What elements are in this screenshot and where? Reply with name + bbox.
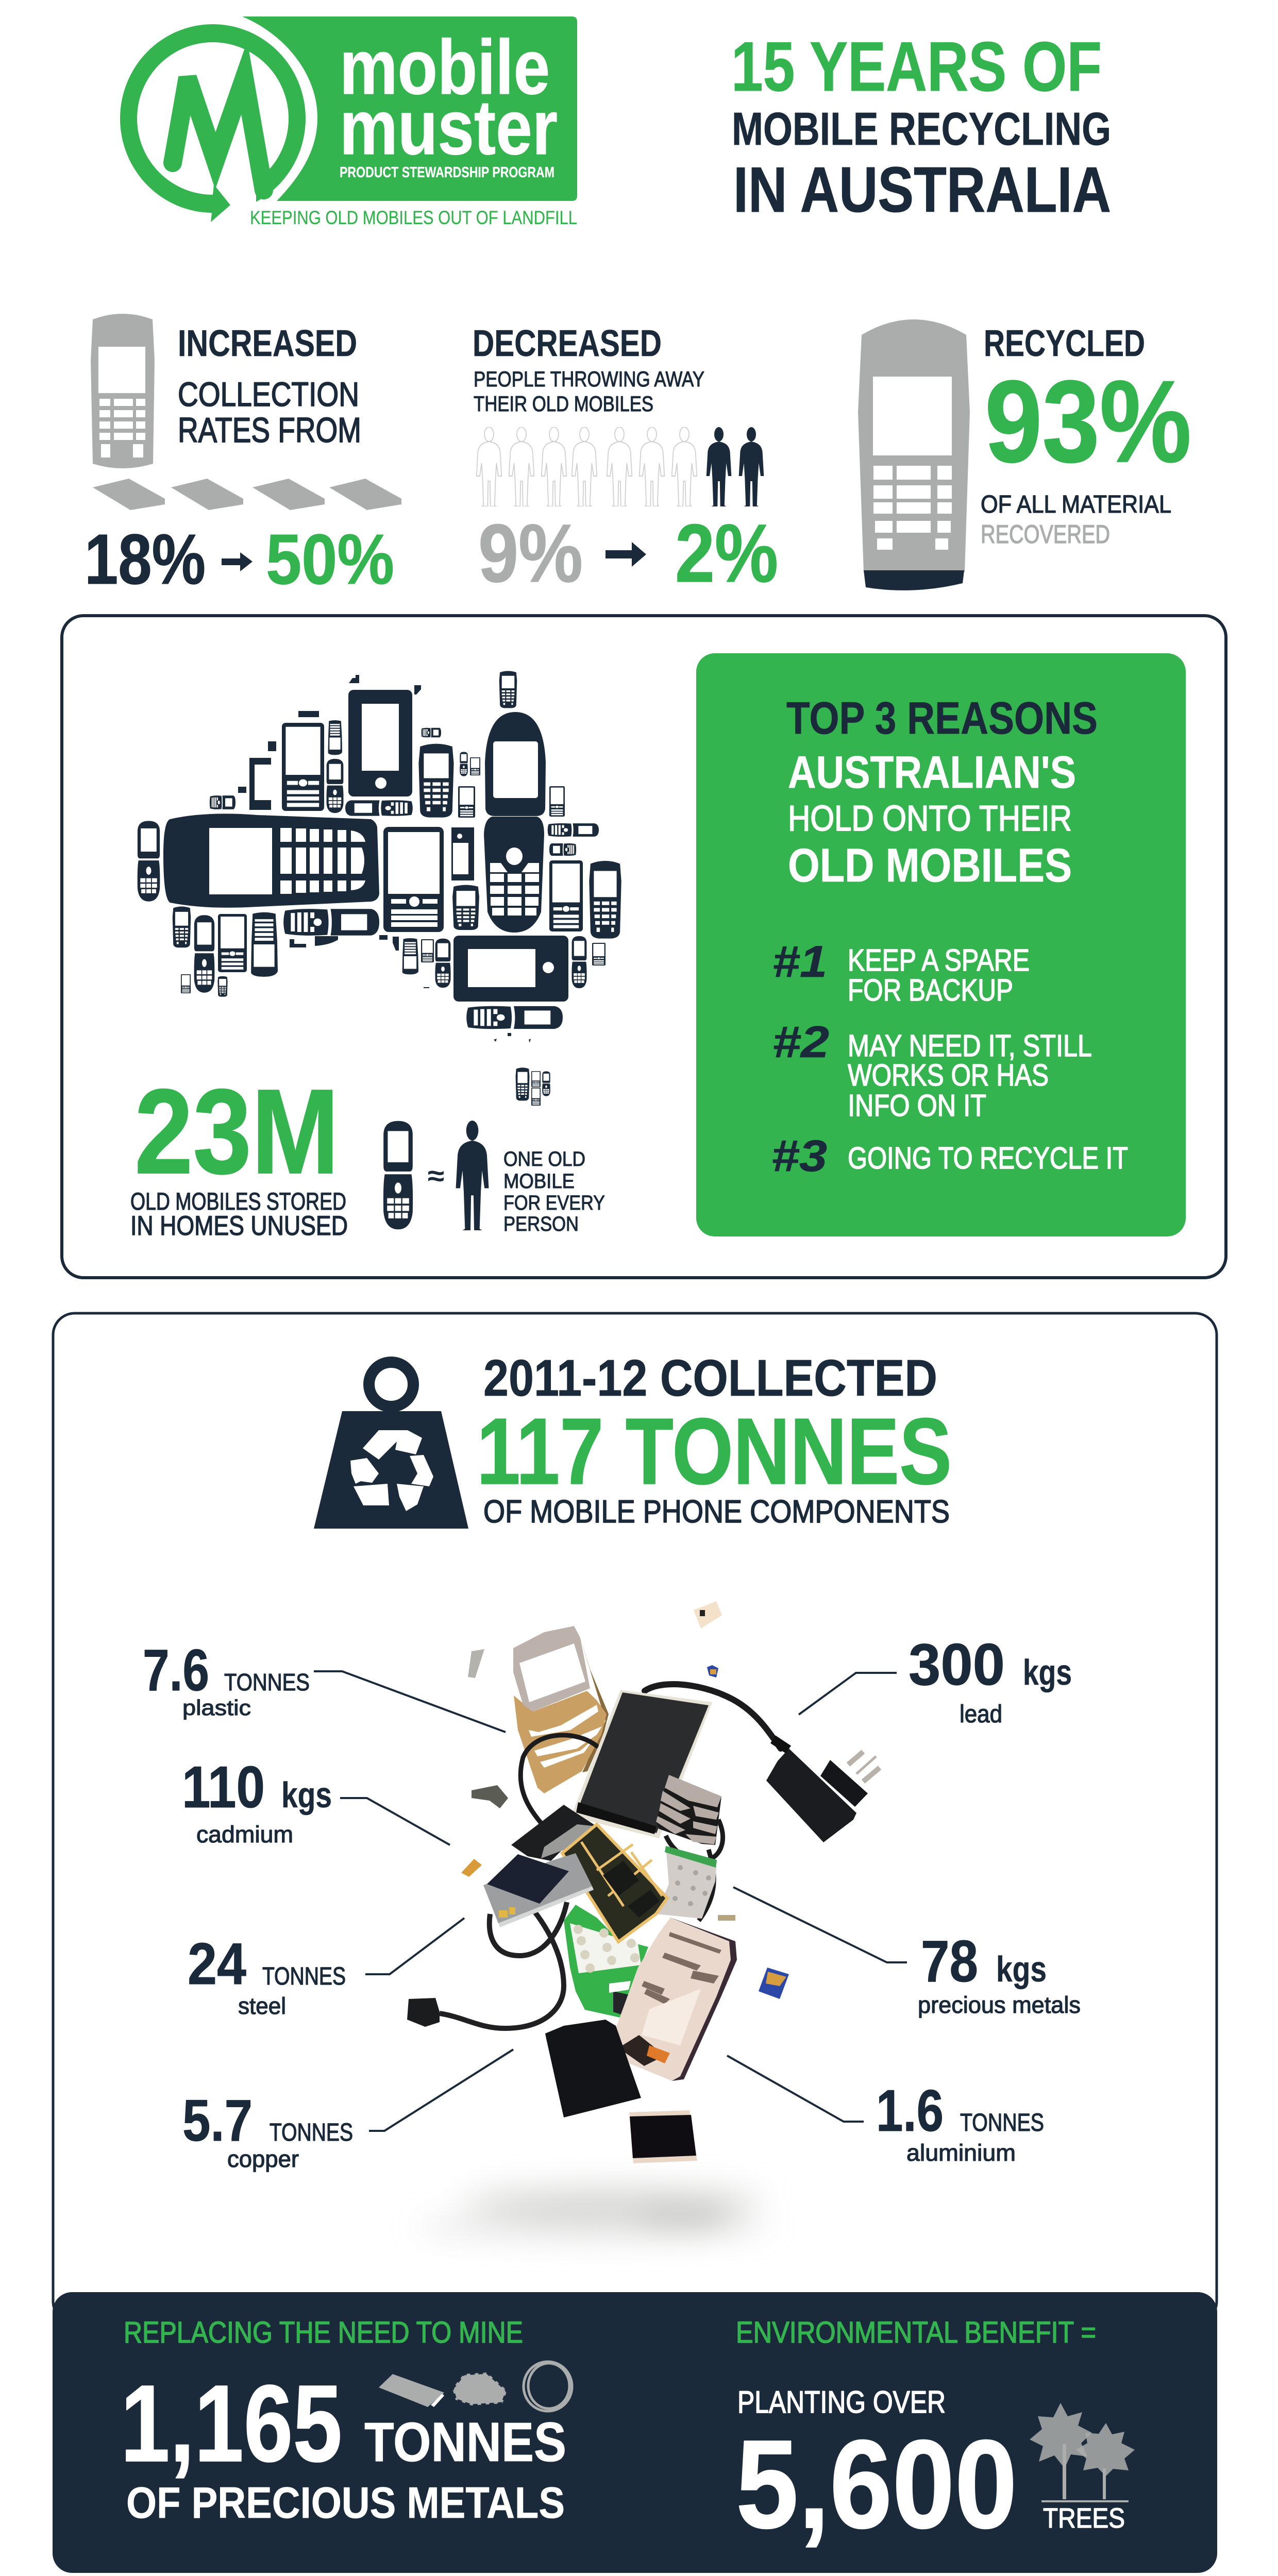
callout: steel: 24 [188,1931,246,1997]
logo wordmark: mobile [340,24,550,110]
callout: plastic: plastic [182,1696,251,1720]
logo tagline: KEEPING OLD MOBILES OUT OF LANDFILL [250,207,577,228]
callout: aluminium [876,2078,1044,2166]
title [731,27,1111,226]
icon: large phone [858,319,970,590]
callout: aluminium: TONNES [960,2109,1044,2137]
panel: collected tonnes [53,1313,1217,2573]
caption: stored unused: IN HOMES UNUSED [130,1211,348,1241]
callout: cadmium: cadmium [196,1821,293,1848]
callout: steel: TONNES [262,1963,346,1990]
callout: precious metals: precious metals [918,1992,1081,2018]
cable [645,1684,781,1749]
1,165 tonnes [121,2362,566,2528]
callout: plastic: TONNES [224,1669,310,1696]
callout: cadmium [182,1755,332,1848]
logo wordmark [340,24,558,181]
reason 1: KEEP A SPARE [848,943,1030,977]
battery [487,1854,569,1904]
callout: copper: copper [227,2146,299,2172]
right loop cable [666,1820,723,1921]
panel: replacing the need to mine [53,2292,1217,2573]
photo: disassembled phone parts [407,1601,880,2163]
reason 1 [772,937,1030,1007]
callout: copper: 5.7 [182,2088,253,2154]
dark band [53,2292,1217,2573]
callout: lead: lead [960,1701,1002,1728]
battery back [483,1853,594,1927]
icon: batteries [93,479,401,510]
heading: 117 TONNES [477,1398,952,1504]
callout: aluminium: 1.6 [876,2078,944,2144]
callout: precious metals: kgs [996,1949,1047,1989]
panel outline [62,616,1226,1278]
icon: trees [1030,2403,1135,2502]
caption: one old mobile: ONE OLD [503,1148,585,1171]
reason 2: MAY NEED IT, STILL [848,1029,1092,1063]
back cover [511,1805,597,1861]
icon: gold bar [379,2374,444,2407]
caption: one old mobile: MOBILE [503,1170,575,1193]
callout lines [314,1671,907,2131]
arrow [606,542,646,567]
heading: DECREASED [473,323,662,364]
floor shadow [417,2187,768,2237]
big horizontal phone [163,814,379,908]
callout: copper: TONNES [270,2119,353,2146]
subheading [178,375,361,450]
panel outline [53,1313,1217,2323]
title: IN AUSTRALIA [733,155,1111,226]
chassis [609,1918,737,2081]
LCD module [571,1690,712,1838]
callout: precious metals: 78 [921,1929,978,1994]
landscape smartphone [453,936,568,1002]
logo wordmark: muster [340,84,558,171]
callout: copper [182,2088,353,2172]
reason 1: FOR BACKUP [848,973,1013,1007]
band heading left: REPLACING THE NEED TO MINE [124,2316,523,2349]
18%: 18% [85,520,206,599]
callout: lead: 300 [909,1632,1005,1698]
heading: OF MOBILE PHONE COMPONENTS [483,1494,950,1530]
logo: MobileMuster [120,16,577,228]
2%: 2% [675,507,778,599]
faceplate [513,1626,609,1793]
stat: increased collection rates [85,314,401,599]
icon: gray phone [91,314,155,468]
loop cable [520,1735,597,1834]
card title: OLD MOBILES [788,839,1072,892]
93%: 93% [985,356,1191,486]
heading [477,1349,952,1530]
icon: flip phone [383,1121,413,1229]
logo ring mark [120,24,306,222]
caption: one old mobile: PERSON [503,1213,579,1235]
SIM card [759,1968,789,1999]
1,165 tonnes: OF PRECIOUS METALS [126,2479,565,2528]
chart: map of Australia made of phones [138,671,621,1043]
reason 2: INFO ON IT [848,1089,986,1123]
subheading: RATES FROM [178,411,361,450]
card title: AUSTRALIAN'S [788,747,1076,798]
logo green plate [242,16,577,201]
caption: OF ALL MATERIAL [981,491,1171,518]
stat: decreased landfill [473,323,778,599]
reason 3 [771,1131,1128,1181]
black cover [545,2020,641,2117]
green card [696,653,1186,1236]
callout: lead: kgs [1023,1652,1072,1692]
reason 2 [772,1018,1092,1123]
subheading: COLLECTION [178,375,359,413]
card title [786,692,1098,892]
9%: 9% [478,507,583,599]
LCD loose [629,2110,697,2163]
keypad circuit board [656,1846,717,1919]
reason 2: WORKS OR HAS [848,1058,1049,1092]
callout: lead [909,1632,1072,1728]
callout: precious metals [918,1929,1081,2018]
icon: weight with recycling symbol [314,1362,468,1529]
mid smartphone [383,827,444,932]
icon: ore rock [452,2372,507,2405]
small pieces [461,1601,735,1921]
callout: cadmium: kgs [281,1775,332,1815]
smartphone [348,690,412,796]
remaining handsets [138,671,621,1029]
charger [766,1739,880,1842]
approximately sign: ≈ [428,1161,444,1191]
caption: one old mobile: FOR EVERY [503,1192,605,1214]
reason 3: #3 [771,1131,827,1181]
tasmania phones [516,1067,550,1106]
card title: TOP 3 REASONS [786,692,1098,743]
icon: people row [477,427,764,506]
5,600: 5,600 [736,2414,1017,2554]
caption: stored unused [130,1188,348,1241]
large flip phone bottom [484,817,544,933]
connector [407,1998,440,2027]
logo wordmark: PRODUCT STEWARDSHIP PROGRAM [340,164,554,181]
arrow [222,552,253,571]
gold main board [562,1824,667,1942]
1,165 tonnes: 1,165 [121,2362,342,2484]
trees label: TREES [1043,2503,1125,2534]
callout: steel [188,1931,346,2019]
callout: plastic [143,1638,310,1720]
dark fragments [238,675,531,1043]
heading: 2011-12 COLLECTED [483,1349,937,1407]
caption: one old mobile [503,1148,605,1235]
title: 15 YEARS OF [731,27,1102,106]
reason 3: GOING TO RECYCLE IT [848,1141,1128,1175]
reason 2: #2 [772,1018,829,1067]
callout: aluminium: aluminium [906,2140,1016,2166]
heading: RECYCLED [984,323,1145,364]
subheading: PEOPLE THROWING AWAY [474,367,704,391]
panel: stored mobiles [62,616,1226,1278]
caption: stored unused: OLD MOBILES STORED [130,1188,346,1215]
subheading [474,367,704,416]
panel: top 3 reasons [696,653,1186,1236]
1,165 tonnes: TONNES [364,2411,566,2473]
stat: recycled [858,319,1191,590]
icon: ring [524,2362,572,2411]
callout: steel: steel [238,1993,286,2019]
keypad [656,1775,721,1845]
reason 1: #1 [772,937,827,987]
card title: HOLD ONTO THEIR [788,798,1072,838]
title: MOBILE RECYCLING [732,104,1111,155]
heading: INCREASED [178,323,357,364]
large flip phone top [485,712,546,816]
50%: 50% [266,520,394,599]
subheading: THEIR OLD MOBILES [474,392,653,416]
23M: 23M [134,1064,339,1199]
callout: cadmium: 110 [182,1755,265,1820]
callout: plastic: 7.6 [143,1638,209,1703]
caption gray: RECOVERED [981,520,1110,549]
green circuit board [564,1905,648,2018]
band heading right: ENVIRONMENTAL BENEFIT = [736,2316,1096,2349]
planting over: PLANTING OVER [737,2385,946,2419]
second cable [440,1902,567,2028]
icon: person [456,1121,489,1230]
